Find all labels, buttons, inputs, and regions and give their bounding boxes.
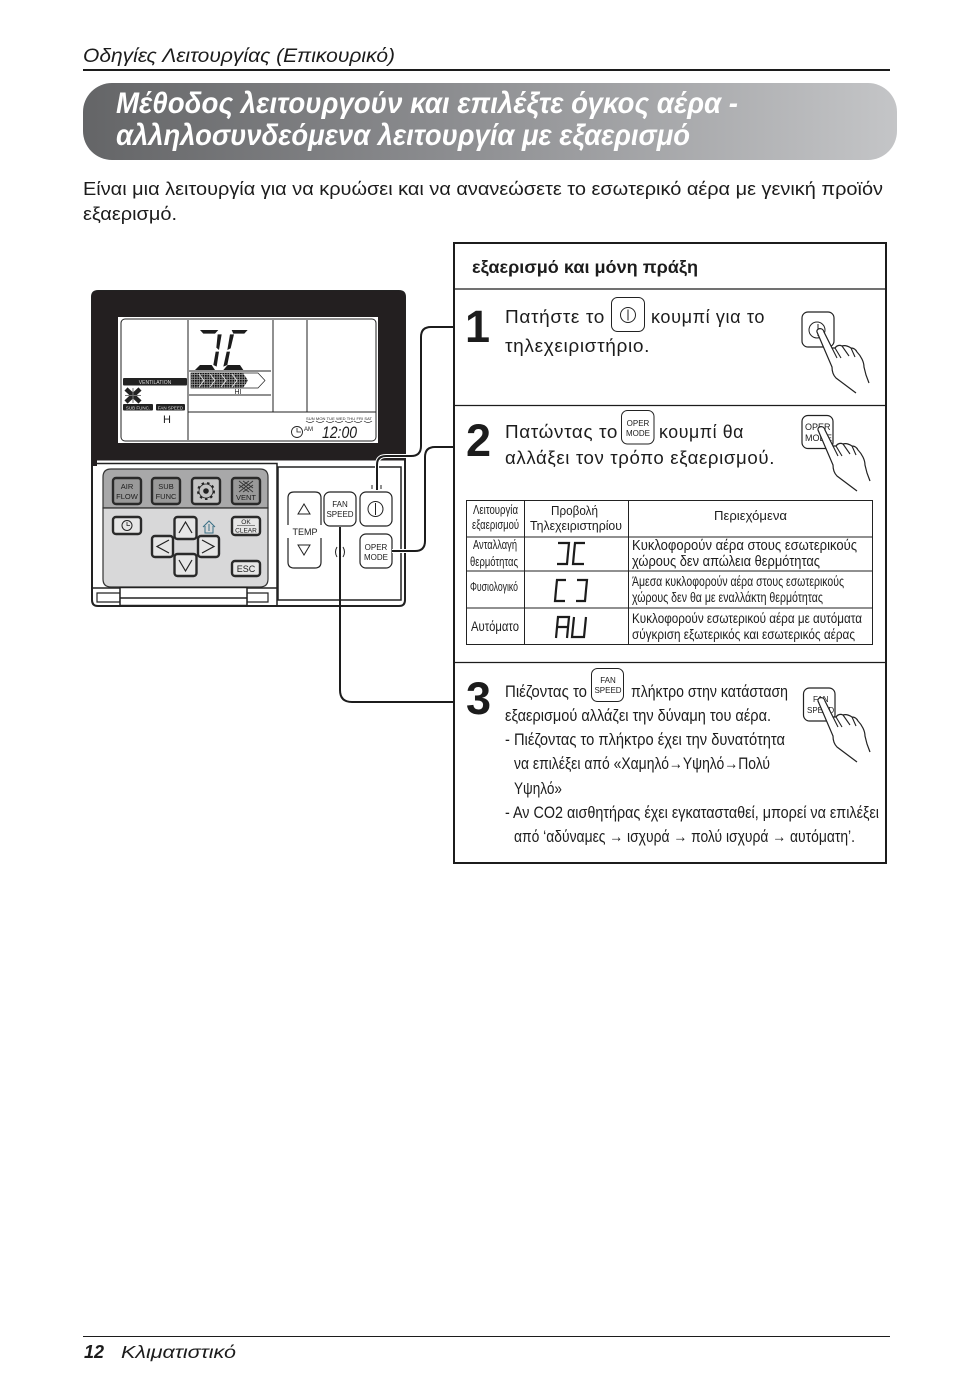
step 1: Πατήστε το bbox=[505, 307, 605, 327]
air flow button: FLOW bbox=[116, 492, 139, 501]
weekdays and clock bbox=[292, 416, 373, 442]
step 2: MODE bbox=[626, 429, 650, 438]
step 2 hand icon: MODE bbox=[805, 433, 832, 443]
connector to step 1 bbox=[377, 327, 455, 490]
step 1 hand icon bbox=[802, 312, 869, 393]
right button panel bbox=[278, 467, 401, 600]
vent button: VENT bbox=[236, 493, 256, 502]
ok clear button: OK bbox=[241, 519, 251, 526]
step 3 hand icon: SPEED bbox=[807, 706, 834, 715]
step 3: SPEED bbox=[594, 686, 622, 695]
ventilation mode labels bbox=[123, 378, 187, 426]
table row: normal: χώρους δεν θα με εναλλάκτη θερμότητας bbox=[632, 590, 823, 605]
step 3: Πιέζοντας το bbox=[505, 682, 587, 701]
step 3 bbox=[466, 668, 879, 846]
step 1: 1 bbox=[465, 301, 490, 352]
table row: heat exchange: Ανταλλαγή bbox=[473, 537, 517, 552]
ventilation mode labels: H bbox=[163, 414, 171, 426]
esc button: ESC bbox=[237, 564, 256, 574]
weekdays and clock: SUN MON TUE WED THU FRI SAT bbox=[306, 416, 373, 421]
oper mode button: OPER bbox=[365, 543, 388, 552]
heading banner: Μέθοδος λειτουργούν και επιλέξτε όγκος αέρα - bbox=[116, 87, 738, 120]
heading banner: αλληλοσυνδεόμενα λειτουργία με εξαερισμό bbox=[116, 119, 690, 152]
air flow button: AIR bbox=[121, 482, 134, 491]
connector lines bbox=[340, 327, 455, 702]
left button panel bbox=[92, 464, 277, 606]
step 3: FAN bbox=[600, 676, 616, 685]
footer: 12 bbox=[84, 1342, 104, 1362]
table row: normal: Άμεσα κυκλοφορούν αέρα στους εσωτερικούς bbox=[632, 574, 844, 589]
remote controller illustration bbox=[92, 291, 405, 606]
instruction panel bbox=[454, 243, 886, 863]
fan speed bar: HI bbox=[234, 389, 242, 396]
table header bbox=[472, 502, 787, 533]
step 2: αλλάξει τον τρόπο εξαερισμού. bbox=[505, 448, 775, 468]
weekdays and clock: 12:00 bbox=[322, 423, 357, 442]
table header: εξαερισμού bbox=[472, 517, 519, 532]
step 2 bbox=[466, 410, 870, 491]
step 2: κουμπί θα bbox=[659, 422, 744, 442]
table row: auto bbox=[471, 610, 862, 642]
ventilation mode labels: VENTILATION bbox=[139, 380, 172, 386]
step 2 hand icon: OPER bbox=[805, 422, 831, 432]
LCD digits bbox=[195, 330, 248, 370]
step 3: από ‘αδύναμες → ισχυρά → πολύ ισχυρά → αυτόματη’. bbox=[514, 827, 855, 846]
page section title: Οδηγίες Λειτουργίας (Επικουρικό) bbox=[83, 46, 395, 67]
air flow button bbox=[113, 478, 141, 504]
table header: Προβολή bbox=[551, 503, 598, 518]
fan speed button: SPEED bbox=[326, 510, 354, 519]
heading banner bbox=[83, 83, 897, 160]
table row: normal: Φυσιολογικό bbox=[470, 579, 518, 594]
step 3: εξαερισμού αλλάζει την δύναμη του αέρα. bbox=[505, 706, 771, 725]
ventilation modes table bbox=[466, 500, 873, 645]
step 1 bbox=[465, 298, 869, 393]
step 3: - Πιέζοντας το πλήκτρο έχει την δυνατότητα bbox=[505, 730, 785, 749]
ventilation mode labels: SUB FUNC. bbox=[126, 406, 150, 410]
settings button bbox=[192, 478, 220, 504]
vent button bbox=[232, 478, 260, 504]
direction buttons bbox=[152, 517, 219, 576]
footer: Κλιματιστικό bbox=[121, 1342, 236, 1362]
step 3: πλήκτρο στην κατάσταση bbox=[631, 682, 788, 701]
table row: auto: Αυτόματο bbox=[471, 618, 519, 634]
table row: auto: Κυκλοφορούν εσωτερικού αέρα με αυτόματα bbox=[632, 610, 862, 626]
step 3: να επιλέξει από «Χαμηλό→Υψηλό→Πολύ bbox=[514, 754, 770, 773]
step 2: Πατώντας το bbox=[505, 422, 618, 442]
sub func button: FUNC bbox=[156, 492, 177, 501]
fan speed bar bbox=[191, 373, 265, 396]
step 1: κουμπί για το bbox=[651, 307, 765, 327]
ok clear button bbox=[232, 517, 260, 535]
bottom flap bbox=[97, 593, 268, 602]
step 3 hand icon: FAN bbox=[813, 695, 829, 704]
table row: heat exchange bbox=[470, 537, 857, 570]
table header: Περιεχόμενα bbox=[714, 508, 787, 523]
table row: normal bbox=[470, 574, 844, 605]
table header: Λειτουργία bbox=[473, 502, 518, 517]
intro text: Είναι μια λειτουργία για να κρυώσει και να ανανεώσετε το εσωτερικό αέρα με γενική προϊόν bbox=[83, 179, 883, 199]
fan speed button: FAN bbox=[332, 500, 348, 509]
step 3 hand icon bbox=[804, 688, 870, 762]
LCD screen bbox=[118, 317, 378, 443]
intro text: εξαερισμό. bbox=[83, 204, 177, 224]
temp rocker button: TEMP bbox=[292, 527, 318, 537]
fan speed button bbox=[324, 492, 356, 526]
step 1: τηλεχειριστήριο. bbox=[505, 336, 650, 356]
sub func button bbox=[152, 478, 180, 504]
table row: heat exchange: χώρους δεν απώλεια θερμότητας bbox=[632, 554, 820, 570]
timer button bbox=[113, 517, 141, 534]
table header: Τηλεχειριστηρίου bbox=[530, 518, 622, 533]
oper mode button bbox=[360, 534, 392, 568]
house icon bbox=[203, 521, 215, 533]
ok clear button: CLEAR bbox=[235, 528, 257, 534]
weekdays and clock: AM bbox=[304, 427, 313, 433]
sub func button: SUB bbox=[158, 482, 174, 491]
connector to step 2 bbox=[392, 447, 455, 551]
oper mode button: MODE bbox=[364, 553, 388, 562]
power button bbox=[360, 485, 392, 526]
controller body bbox=[92, 291, 405, 606]
step 2: OPER bbox=[627, 419, 650, 428]
step 3: 3 bbox=[466, 673, 491, 724]
esc button bbox=[232, 561, 260, 576]
step 2: 2 bbox=[466, 415, 491, 466]
footer bbox=[83, 1336, 890, 1362]
step 2 hand icon bbox=[802, 416, 870, 491]
table row: heat exchange: θερμότητας bbox=[470, 554, 518, 569]
step 3: Υψηλό» bbox=[514, 779, 562, 798]
table row: heat exchange: Κυκλοφορούν αέρα στους εσωτερικούς bbox=[632, 538, 857, 554]
ventilation mode labels: FAN SPEED bbox=[158, 406, 184, 410]
step 3: - Αν CO2 αισθητήρας έχει εγκατασταθεί, μπορεί να επιλέξει bbox=[505, 803, 879, 822]
intro text bbox=[83, 179, 883, 224]
connector to step 3 bbox=[340, 527, 455, 702]
table row: auto: σύγκριση εξωτερικός και εσωτερικός αέρας bbox=[632, 626, 855, 642]
sensor marks bbox=[336, 547, 344, 557]
panel heading: εξαερισμό και μόνη πράξη bbox=[472, 257, 698, 278]
